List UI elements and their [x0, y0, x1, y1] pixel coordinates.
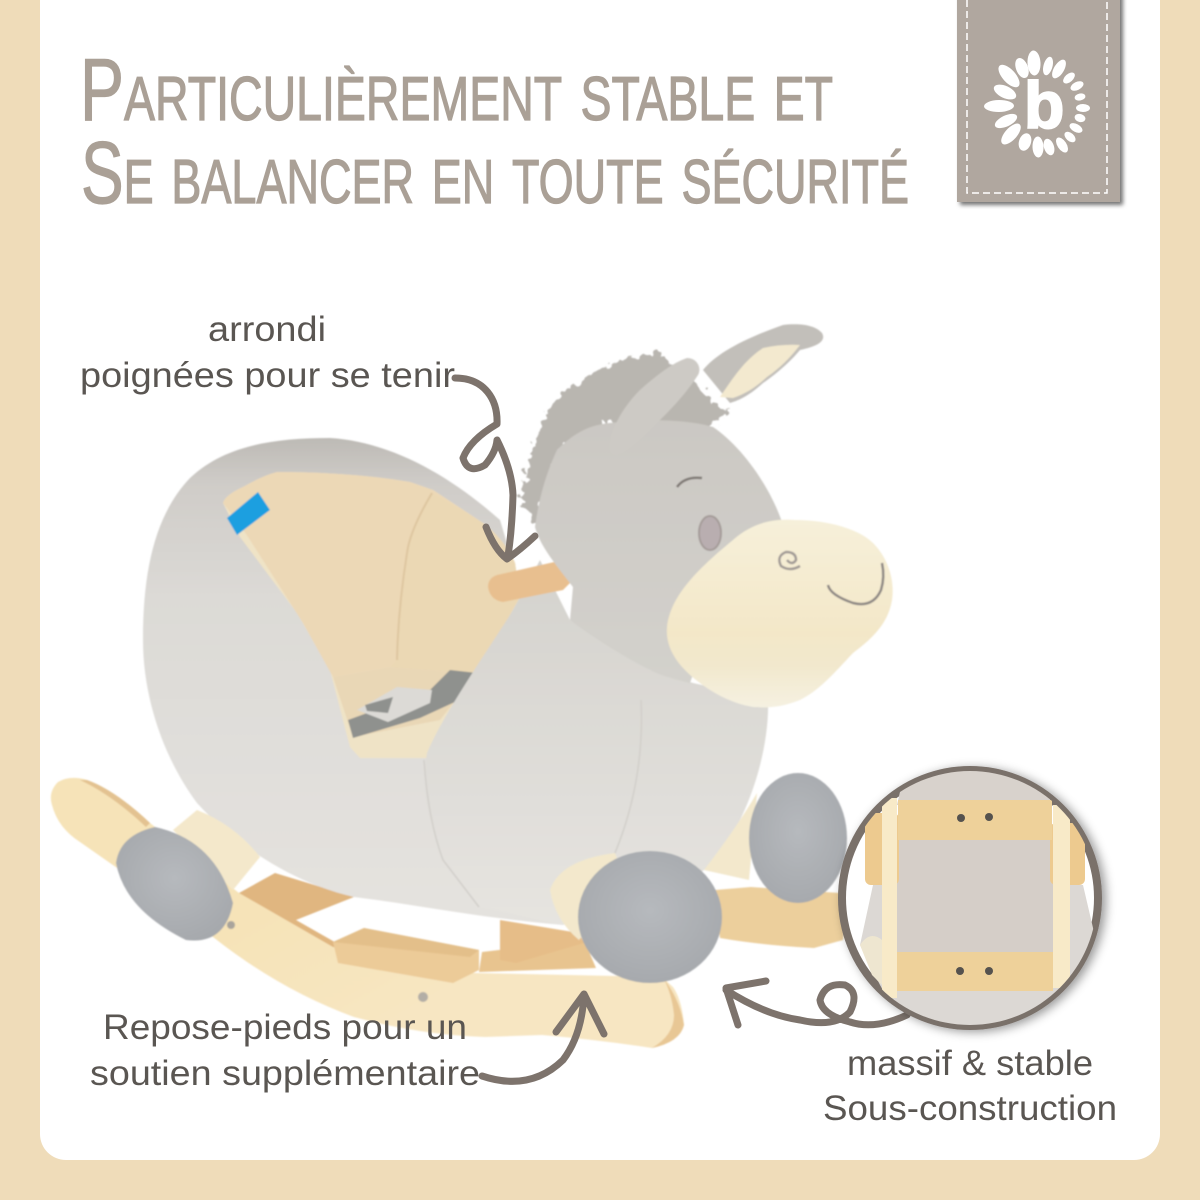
near ear	[610, 358, 699, 454]
icon: brand flower: b	[1024, 68, 1064, 142]
front leg left	[173, 810, 260, 890]
back leg	[704, 793, 757, 880]
crossbar left	[239, 873, 354, 955]
title: Particulièrement stable et	[80, 40, 833, 139]
title: Se balancer en toute sécurité	[81, 123, 909, 222]
front leg right	[550, 853, 625, 940]
mane	[522, 350, 728, 525]
footrest	[333, 928, 479, 983]
annotation: handles	[80, 310, 535, 559]
icon: brand flower	[984, 50, 1090, 158]
annotation: construction: Sous-construction	[823, 1089, 1117, 1128]
seat tag	[227, 492, 270, 535]
near rocker	[51, 778, 684, 1048]
annotation: footrest: soutien supplémentaire	[90, 1054, 480, 1093]
inset: underside view	[842, 770, 1098, 1030]
screws	[227, 921, 235, 929]
label text: arrondi	[208, 310, 326, 349]
head	[535, 420, 783, 683]
product: rocking donkey	[51, 324, 893, 1048]
wooden handle	[488, 560, 573, 602]
label text: Repose-pieds pour un	[103, 1008, 467, 1047]
logo tag	[957, 0, 1120, 202]
far ear	[703, 324, 823, 403]
label text: massif & stable	[847, 1044, 1093, 1083]
face details	[677, 478, 702, 487]
seat interior	[223, 472, 520, 758]
outer shell	[143, 438, 563, 925]
arrow: to handle	[455, 378, 535, 559]
seat belt	[348, 670, 477, 738]
annotation: handles: poignées pour se tenir	[80, 356, 455, 395]
arrow: to rocker	[726, 981, 907, 1025]
arrow: to footrest	[482, 994, 604, 1081]
muzzle	[667, 520, 893, 707]
annotation: footrest	[90, 994, 604, 1093]
center block	[479, 940, 596, 972]
chest and neck	[425, 560, 768, 925]
rear rocker	[715, 887, 844, 948]
annotation: construction	[726, 981, 1117, 1128]
title	[80, 40, 909, 222]
